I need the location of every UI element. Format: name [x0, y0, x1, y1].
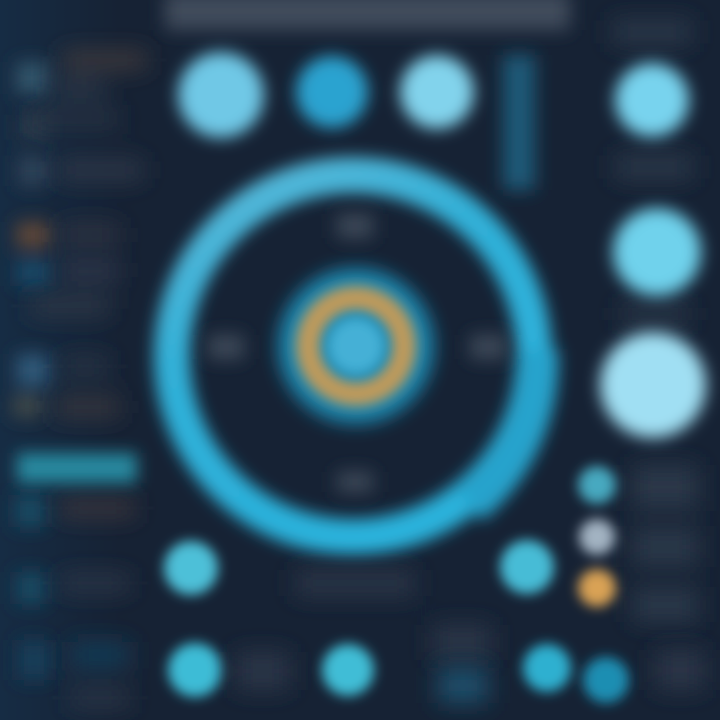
icon: teal marker [16, 572, 46, 604]
left column text lines [30, 52, 147, 706]
icon: slate marker [18, 115, 48, 139]
icon: orange marker [16, 222, 50, 248]
lower small circles [164, 540, 629, 703]
icon: orange marker [12, 395, 42, 417]
icon: blue marker [16, 354, 50, 386]
vertical bar chart [503, 55, 535, 190]
icon: blue marker [16, 62, 48, 94]
right column circles [600, 63, 706, 438]
bottom labels [235, 570, 705, 690]
teal disc [278, 268, 434, 424]
main ring [172, 175, 538, 537]
heading bar [165, 0, 570, 30]
orange ring [308, 298, 404, 394]
left highlight bar [17, 453, 137, 483]
legend dots [578, 466, 616, 607]
top row circles [178, 52, 474, 138]
left column tint [0, 0, 120, 720]
icon: slate marker [18, 156, 48, 186]
bottom teal block [438, 668, 488, 703]
right column captions [612, 20, 698, 622]
ring inner labels [208, 214, 506, 492]
central target [278, 268, 434, 424]
icon: teal marker [18, 640, 50, 680]
center dot [328, 318, 384, 374]
icon: teal marker [16, 260, 50, 286]
left column list [12, 62, 50, 680]
icon: teal marker [14, 495, 46, 527]
